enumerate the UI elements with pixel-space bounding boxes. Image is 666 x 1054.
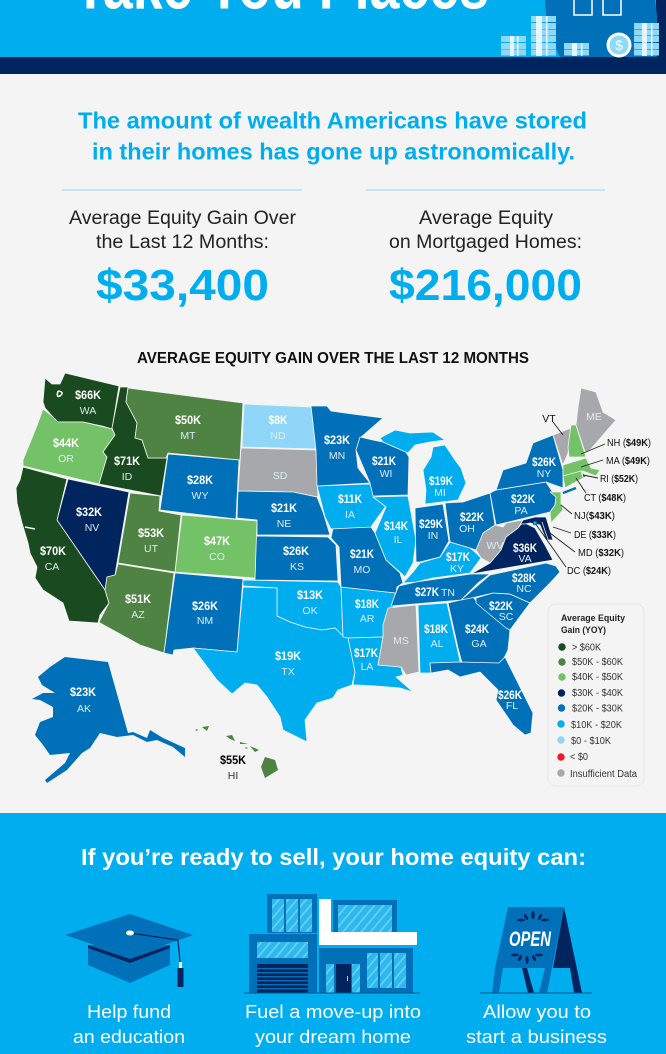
state labels: $8K bbox=[268, 413, 288, 427]
state labels: NC bbox=[516, 583, 532, 595]
state labels: TN bbox=[441, 587, 455, 599]
state labels: SC bbox=[499, 611, 514, 623]
state labels: $55K bbox=[220, 753, 246, 767]
icon: open sign: OPEN bbox=[509, 928, 552, 951]
caption: move-up: Fuel a move-up into bbox=[245, 1001, 421, 1022]
state labels: IN bbox=[428, 530, 438, 542]
icon: coin stacks bbox=[501, 16, 659, 58]
heading: wealth statement: in their homes has gone up astronomically. bbox=[92, 138, 575, 164]
legend: $20K - $30K bbox=[572, 704, 623, 714]
legend: $10K - $20K bbox=[571, 720, 622, 731]
state labels: WY bbox=[192, 490, 208, 502]
heading: ready to sell: If you’re ready to sell, your home equity can: bbox=[81, 844, 586, 870]
legend: $50K - $60K bbox=[572, 657, 623, 668]
state labels: $18K bbox=[424, 622, 448, 636]
legend: Insufficient Data bbox=[570, 769, 637, 780]
legend: Average Equity bbox=[561, 613, 626, 624]
state labels: $44K bbox=[53, 436, 79, 450]
state labels: $24K bbox=[465, 622, 489, 636]
state labels: MO bbox=[354, 564, 370, 576]
panel: average equity on mortgaged homes stat: $216,000 bbox=[389, 261, 582, 310]
northeast callouts: NH ($49K) bbox=[607, 437, 651, 449]
state labels: WA bbox=[80, 405, 96, 417]
state labels: $14K bbox=[384, 519, 408, 533]
state labels: ND bbox=[270, 430, 286, 442]
panel: header banner bbox=[0, 0, 666, 74]
state labels: AK bbox=[77, 703, 91, 715]
state labels: $23K bbox=[70, 685, 96, 699]
northeast callouts: CT ($48K) bbox=[584, 492, 626, 504]
northeast callouts: DE ($33K) bbox=[574, 529, 616, 541]
icon: building windows bbox=[574, 0, 621, 15]
state labels: ME bbox=[586, 411, 602, 423]
state labels: KY bbox=[450, 563, 464, 575]
state labels: GA bbox=[471, 638, 487, 650]
state labels: OR bbox=[58, 453, 74, 465]
state labels: SD bbox=[273, 470, 288, 482]
panel: average equity gain stat: Average Equity Gain Over bbox=[69, 208, 297, 229]
state labels: $29K bbox=[419, 517, 443, 531]
panel: average equity gain stat: the Last 12 Months: bbox=[96, 232, 269, 253]
panel: average equity gain stat: $33,400 bbox=[96, 261, 269, 310]
state labels: IL bbox=[394, 534, 403, 546]
state labels: MS bbox=[393, 635, 409, 647]
northeast callouts: DC ($24K) bbox=[567, 565, 611, 577]
caption: move-up: your dream home bbox=[255, 1026, 411, 1047]
northeast callouts: VT bbox=[542, 413, 556, 425]
legend bbox=[548, 604, 644, 786]
state labels: ID bbox=[122, 471, 133, 483]
state labels: $11K bbox=[338, 492, 362, 506]
state labels: AR bbox=[360, 613, 375, 625]
state labels: MN bbox=[329, 450, 345, 462]
panel: average equity on mortgaged homes stat: on Mortgaged Homes: bbox=[389, 232, 582, 253]
state labels: $28K bbox=[187, 473, 213, 487]
state labels: NV bbox=[85, 522, 99, 534]
caption: business: start a business bbox=[466, 1026, 607, 1047]
legend: < $0 bbox=[570, 752, 588, 763]
state labels: KS bbox=[290, 561, 304, 573]
icon: coin stacks: $ bbox=[615, 37, 623, 53]
state labels: NY bbox=[537, 468, 551, 480]
legend: $40K - $50K bbox=[572, 672, 623, 683]
state labels: $19K bbox=[275, 649, 301, 663]
state labels: MI bbox=[434, 487, 446, 499]
state labels: $13K bbox=[297, 588, 323, 602]
caption: business: Allow you to bbox=[483, 1001, 591, 1022]
legend: Gain (YOY) bbox=[561, 625, 606, 636]
northeast callouts bbox=[533, 413, 651, 577]
state labels: $28K bbox=[512, 571, 536, 585]
state labels: UT bbox=[144, 543, 159, 555]
state labels: $22K bbox=[460, 510, 484, 524]
state labels: PA bbox=[514, 505, 528, 517]
state labels: AZ bbox=[131, 609, 145, 621]
state labels: $26K bbox=[532, 455, 556, 469]
state labels: MT bbox=[180, 430, 196, 442]
state labels: WV bbox=[487, 540, 503, 552]
state labels: $21K bbox=[271, 501, 297, 515]
state labels: $51K bbox=[125, 592, 151, 606]
state labels: $53K bbox=[138, 526, 164, 540]
legend: $30K - $40K bbox=[572, 688, 623, 699]
northeast callouts: MA ($49K) bbox=[606, 455, 650, 467]
state labels bbox=[40, 388, 602, 782]
state labels: LA bbox=[361, 661, 373, 673]
map: Alaska bbox=[32, 657, 185, 783]
state labels: $26K bbox=[283, 544, 309, 558]
icon: open sign bbox=[480, 907, 592, 994]
state labels: $32K bbox=[76, 505, 102, 519]
icon: graduation cap bbox=[65, 914, 193, 987]
state labels: $19K bbox=[429, 474, 453, 488]
state labels: $66K bbox=[75, 388, 101, 402]
state labels: OK bbox=[302, 605, 318, 617]
map: Hawaii bbox=[195, 726, 278, 778]
state labels: NM bbox=[197, 615, 213, 627]
caption: move-up bbox=[245, 1001, 421, 1047]
northeast callouts: RI ($52K) bbox=[600, 473, 638, 485]
state labels: WI bbox=[380, 468, 392, 480]
state labels: $70K bbox=[40, 544, 66, 558]
heading: map title: AVERAGE EQUITY GAIN OVER THE LAST 12 MONTHS bbox=[137, 350, 529, 367]
legend: > $60K bbox=[572, 642, 601, 654]
state labels: $22K bbox=[511, 492, 535, 506]
state labels: $21K bbox=[372, 454, 396, 468]
state labels: $18K bbox=[355, 597, 379, 611]
chart: US map of equity gain by state bbox=[16, 373, 651, 783]
heading: wealth statement: The amount of wealth Americans have stored bbox=[78, 108, 587, 134]
state labels: CA bbox=[45, 561, 59, 573]
legend: $0 - $10K bbox=[571, 736, 611, 747]
state labels: $26K bbox=[192, 599, 218, 613]
state labels: $22K bbox=[489, 599, 513, 613]
northeast callouts: NJ($43K) bbox=[574, 510, 615, 522]
state labels: $17K bbox=[354, 646, 378, 660]
state labels: $23K bbox=[324, 433, 350, 447]
caption: education: an education bbox=[73, 1026, 185, 1047]
state labels: IA bbox=[345, 509, 355, 521]
caption: education bbox=[73, 1001, 185, 1047]
state labels: $36K bbox=[513, 541, 537, 555]
state labels: VA bbox=[518, 553, 532, 565]
state labels: $17K bbox=[446, 550, 470, 564]
panel: average equity on mortgaged homes stat: Average Equity bbox=[419, 208, 554, 229]
state labels: $71K bbox=[114, 454, 140, 468]
state labels: HI bbox=[228, 770, 238, 782]
state labels: $50K bbox=[175, 413, 201, 427]
panel: average equity gain stat bbox=[62, 190, 302, 310]
panel: average equity on mortgaged homes stat bbox=[366, 190, 605, 310]
caption: business bbox=[466, 1001, 607, 1047]
state labels: OH bbox=[459, 523, 475, 535]
state labels: $47K bbox=[204, 534, 230, 548]
panel: if you're ready to sell bbox=[0, 813, 666, 1054]
state labels: $27K bbox=[415, 585, 439, 599]
state labels: NE bbox=[277, 518, 291, 530]
heading: wealth statement bbox=[78, 108, 587, 164]
state labels: $26K bbox=[498, 688, 522, 702]
state labels: $21K bbox=[350, 547, 374, 561]
icon: modern house bbox=[244, 894, 420, 994]
state labels: FL bbox=[506, 700, 518, 712]
northeast callouts: MD ($32K) bbox=[578, 547, 624, 559]
state labels: AL bbox=[431, 638, 444, 650]
caption: education: Help fund bbox=[87, 1001, 171, 1022]
state labels: TX bbox=[281, 666, 295, 678]
state labels: CO bbox=[209, 551, 225, 563]
